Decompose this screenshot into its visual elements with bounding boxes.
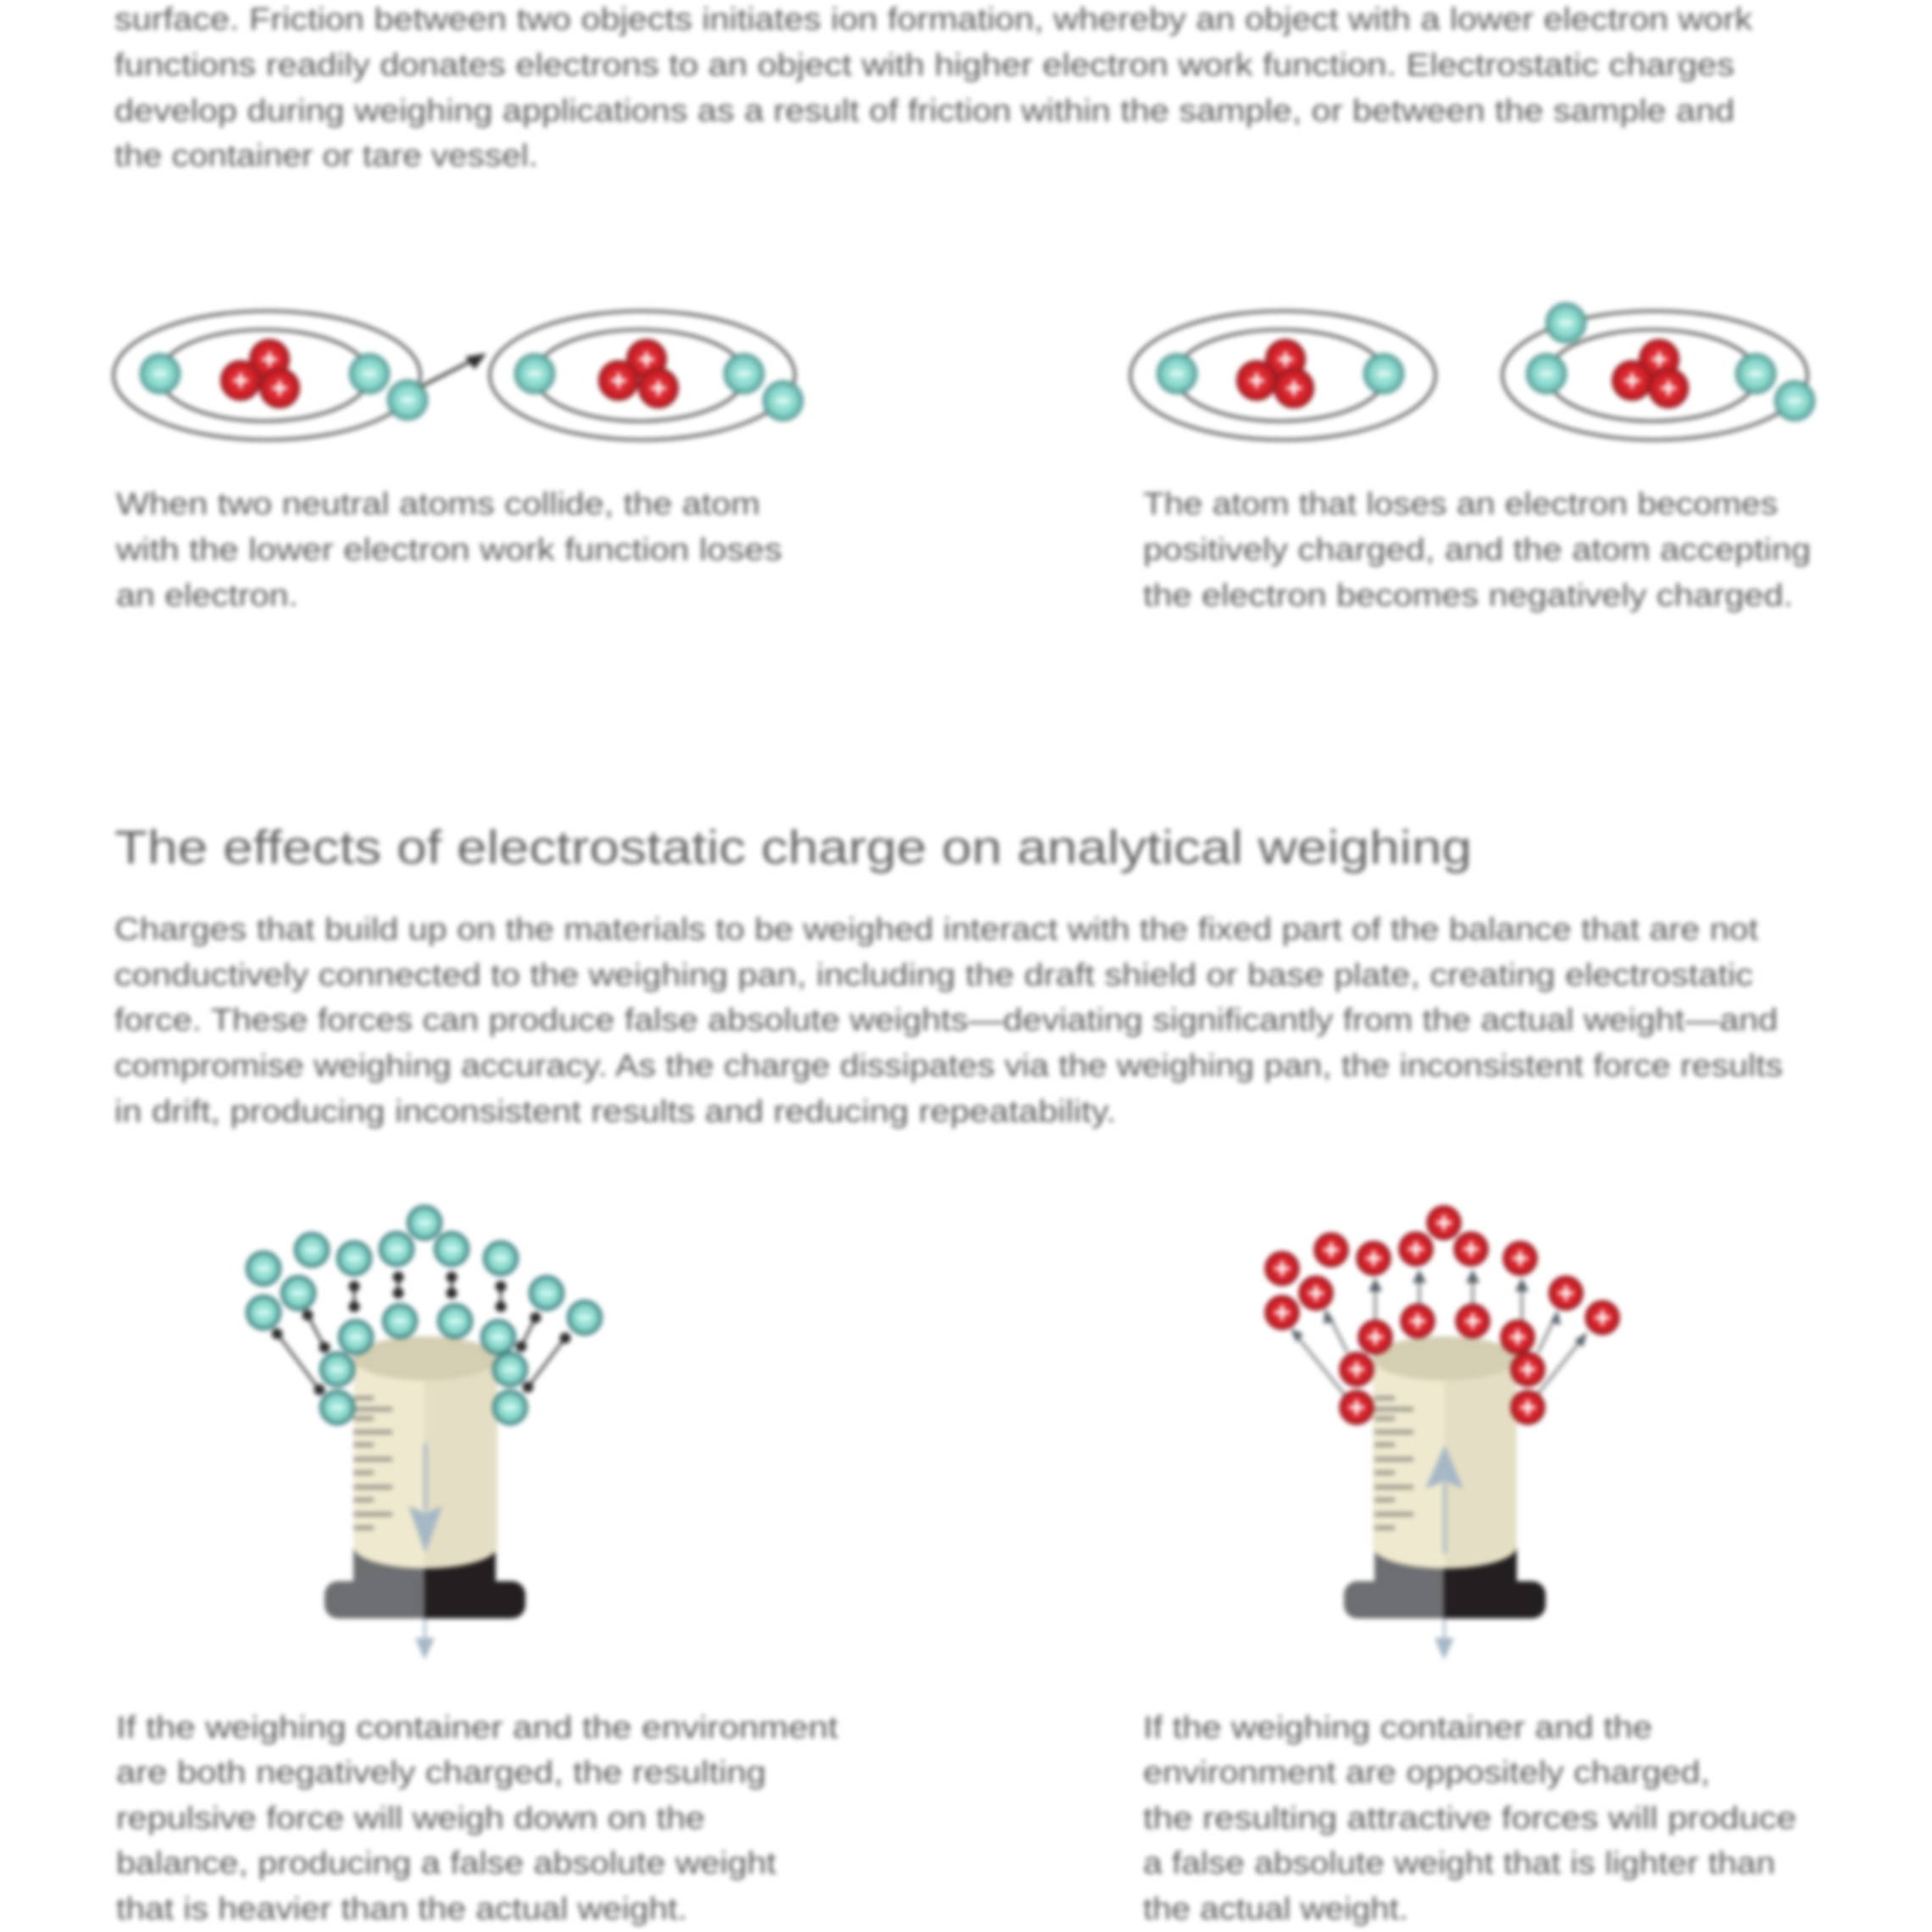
diagram: attractive force, oppositely charged container	[1266, 1207, 1618, 1660]
caption: atoms collide: with the lower electron work function loses	[115, 532, 782, 567]
intro paragraph: surface. Friction between two objects initiates ion formation, whereby an object with a lower electron work	[114, 2, 1753, 36]
effects paragraph	[114, 912, 1783, 1129]
atom: right neutral atom	[490, 311, 802, 440]
arrow: electron transfer	[421, 353, 486, 386]
effects paragraph: force. These forces can produce false absolute weights—deviating significantly from the actual weight—and	[114, 1002, 1778, 1037]
diagram: neutral atoms colliding	[114, 311, 802, 440]
caption: repulsive force: balance, producing a false absolute weight	[116, 1846, 777, 1880]
intro paragraph	[114, 2, 1753, 173]
caption: repulsive force: If the weighing container and the environment	[116, 1710, 839, 1745]
atom: left neutral atom	[114, 311, 427, 440]
attraction arrows	[1291, 1269, 1587, 1398]
caption: charged atoms: positively charged, and the atom accepting	[1143, 532, 1811, 567]
negative charges	[247, 1207, 602, 1424]
arrow: reading direction	[1435, 1618, 1454, 1660]
caption: atoms collide: an electron.	[116, 578, 298, 613]
caption: repulsive force: that is heavier than the actual weight.	[116, 1891, 687, 1926]
caption: charged atoms: the electron becomes negatively charged.	[1143, 578, 1793, 613]
positive charges	[1266, 1207, 1618, 1424]
intro paragraph: the container or tare vessel.	[114, 138, 538, 173]
intro paragraph: functions readily donates electrons to an object with higher electron work function. Electrostatic charges	[114, 47, 1735, 82]
caption: charged atoms: The atom that loses an electron becomes	[1143, 486, 1778, 521]
arrow: upward force	[1425, 1445, 1463, 1553]
diagram: repulsive force, negatively charged container	[247, 1207, 602, 1660]
caption: repulsive force	[116, 1710, 839, 1926]
balance base	[325, 1546, 525, 1618]
arrow: downward force	[408, 1443, 442, 1553]
weighing container	[1373, 1336, 1517, 1568]
repulsion arrows	[271, 1271, 571, 1395]
weighing container	[353, 1336, 497, 1568]
caption: repulsive force: repulsive force will weigh down on the	[116, 1801, 705, 1835]
caption: atoms collide	[115, 486, 782, 613]
diagram: charged atoms after transfer	[1130, 303, 1814, 440]
balance base	[1344, 1546, 1546, 1618]
caption: attractive force: the actual weight.	[1143, 1891, 1408, 1926]
caption: attractive force	[1143, 1710, 1796, 1926]
intro paragraph: develop during weighing applications as a result of friction within the sample, or between the sample and	[114, 93, 1735, 128]
atom: negatively charged atom	[1502, 303, 1814, 440]
caption: attractive force: a false absolute weight that is lighter than	[1143, 1846, 1775, 1880]
caption: attractive force: the resulting attractive forces will produce	[1143, 1801, 1796, 1835]
heading: The effects of electrostatic charge on analytical weighing	[114, 820, 1472, 874]
arrow: reading pushed down	[415, 1618, 435, 1660]
caption: attractive force: environment are oppositely charged,	[1143, 1755, 1710, 1790]
caption: charged atoms	[1143, 486, 1811, 613]
caption: repulsive force: are both negatively charged, the resulting	[116, 1755, 766, 1790]
atom: positively charged atom	[1130, 311, 1435, 440]
effects paragraph: Charges that build up on the materials to be weighed interact with the fixed part of the balance that are not	[114, 912, 1759, 947]
caption: atoms collide: When two neutral atoms collide, the atom	[116, 486, 760, 521]
effects paragraph: in drift, producing inconsistent results and reducing repeatability.	[114, 1094, 1116, 1129]
effects paragraph: conductively connected to the weighing pan, including the draft shield or base plate, creating electrostatic	[114, 958, 1753, 992]
effects paragraph: compromise weighing accuracy. As the charge dissipates via the weighing pan, the inconsistent force results	[114, 1048, 1783, 1083]
caption: attractive force: If the weighing container and the	[1143, 1710, 1652, 1745]
